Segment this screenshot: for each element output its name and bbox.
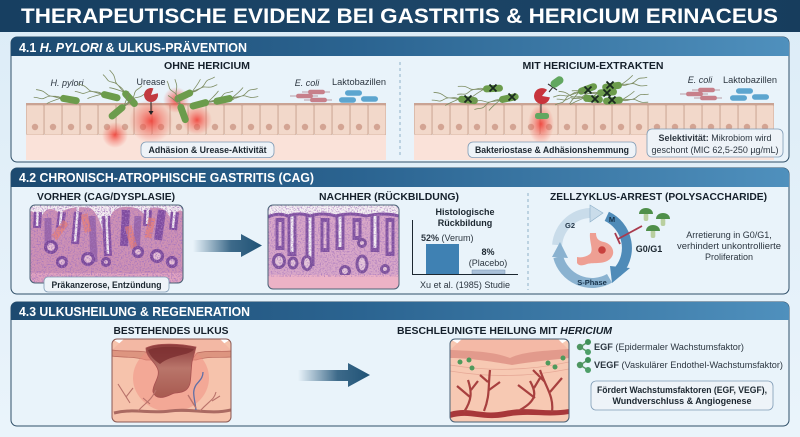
text: Arretierung: Arretierung in G0/G1,: [686, 230, 772, 240]
sub-panel: mit Hericium: [414, 61, 783, 160]
glow under inhibitor: [528, 104, 554, 144]
section header 4.3: 4.3 ULKUSHEILUNG & REGENERATION: [19, 304, 250, 319]
section header 4.1: [11, 37, 789, 56]
bar chart: histologische Rückbildung: Rückbildung: [438, 218, 492, 228]
epithelium left: [26, 103, 386, 160]
bar chart: histologische Rückbildung: Xu et al. (1985) Studie: [420, 280, 510, 290]
bar chart: histologische Rückbildung: 52% (Verum): [421, 233, 474, 243]
section header 4.3: [11, 302, 789, 320]
title banner: THERAPEUTISCHE EVIDENZ BEI GASTRITIS & HERICIUM ERINACEUS: [21, 5, 778, 28]
caption: Präkanzerose: Präkanzerose, Entzündung: [52, 280, 162, 290]
inhibition line: [615, 226, 642, 244]
commensal bacteria right: [680, 88, 769, 101]
illustration: ulcer: [112, 339, 231, 422]
caption: Adhäsion: [141, 142, 274, 158]
icon: VEGF molecule: [577, 357, 591, 373]
labels: commensals: Laktobazillen: [723, 75, 777, 85]
section header 4.1: 4.1 H. PYLORI & ULKUS-PRÄVENTION: [19, 40, 247, 55]
callout: Selektivität: [647, 129, 783, 157]
commensal bacteria left: [290, 90, 378, 103]
caption: Adhäsion: Adhäsion & Urease-Aktivität: [148, 145, 267, 155]
callout: Selektivität: Selektivität: Mikrobiom wird: [658, 133, 772, 143]
image frame after: [268, 205, 399, 289]
caption: Bakteriostase: [468, 142, 636, 158]
panel: 4.2 CAG: [11, 168, 789, 294]
callout: Selektivität: geschont (MIC 62,5-250 µg/mL): [652, 145, 778, 155]
heading: vorher: VORHER (CAG/DYSPLASIE): [37, 192, 175, 203]
divider: [399, 62, 401, 158]
epithelium right: [414, 103, 774, 160]
callout: Wachstumsfaktoren: [591, 381, 773, 410]
heading: beschleunigte Heilung: BESCHLEUNIGTE HEILUNG MIT HERICIUM: [397, 326, 613, 337]
heading: mit Hericium: MIT HERICIUM-EXTRAKTEN: [522, 61, 664, 72]
label: G0/G1: G0/G1: [636, 244, 662, 254]
text: Arretierung: Proliferation: [705, 252, 753, 262]
labels: organisms: Laktobazillen: [332, 77, 386, 87]
H. pylori bacteria: [33, 69, 259, 126]
inflammation glows: [102, 87, 212, 148]
histology after: [268, 205, 399, 289]
inhibited bacteria: [431, 73, 649, 113]
cell cycle diagram: [552, 205, 630, 287]
labels: organisms: [50, 77, 386, 88]
caption: Bakteriostase: Bakteriostase & Adhäsionshemmung: [475, 145, 629, 155]
callout: Wachstumsfaktoren: Fördert Wachstumsfaktoren (EGF, VEGF),: [597, 385, 767, 395]
text: Arretierung: verhindert unkontrollierte: [677, 241, 781, 251]
labels: commensals: E. coli: [688, 75, 713, 85]
text: VEGF: VEGF (Vaskulärer Endothel-Wachstumsfaktor): [594, 360, 783, 370]
icon: EGF molecule: [577, 339, 591, 355]
cell cycle diagram: M: [609, 215, 615, 224]
divider: [527, 193, 529, 290]
labels: organisms: Urease: [136, 77, 166, 87]
arrow: ulcer to healing: [298, 363, 370, 387]
cell cycle diagram: G2: [565, 221, 575, 230]
title banner: [0, 0, 800, 32]
section header 4.2: [11, 168, 789, 187]
heading: ohne Hericium: OHNE HERICIUM: [164, 61, 250, 72]
labels: commensals: [688, 75, 777, 85]
image frame ulcer: [112, 339, 231, 422]
sub-panel: ohne Hericium: [26, 61, 386, 160]
text: EGF: EGF (Epidermaler Wachstumsfaktor): [594, 342, 744, 352]
section header 4.2: 4.2 CHRONISCH-ATROPHISCHE GASTRITIS (CAG): [19, 170, 314, 185]
histology before: [30, 205, 183, 283]
illustration: healing tissue: [450, 339, 569, 422]
arrow: before to after: [193, 234, 262, 257]
icon: stomach: [577, 233, 613, 265]
icon: urease enzyme: [144, 88, 158, 115]
bar chart: histologische Rückbildung: 8%: [481, 247, 495, 257]
caption: Präkanzerose: [44, 277, 169, 292]
panel: 4.3 Ulkusheilung: [11, 302, 789, 426]
text: Arretierung: [677, 230, 781, 262]
callout: Wachstumsfaktoren: Wundverschluss & Angiogenese: [612, 396, 752, 406]
labels: organisms: H. pylori: [50, 78, 84, 88]
heading: Zellzyklus: ZELLZYKLUS-ARREST (POLYSACCHARIDE): [550, 192, 767, 203]
heading: bestehendes Ulkus: BESTEHENDES ULKUS: [114, 326, 229, 337]
panel: 4.1 H. pylori: [11, 37, 789, 162]
heading: nachher: NACHHER (RÜCKBILDUNG): [319, 190, 459, 203]
icon: blocked urease with inhibitor: [534, 75, 565, 119]
icon: mushrooms: [639, 208, 670, 238]
bar chart: histologische Rückbildung: (Placebo): [469, 258, 507, 268]
bar chart: histologische Rückbildung: [412, 207, 518, 290]
image frame before: [30, 205, 183, 283]
bar chart: histologische Rückbildung: Histologische: [435, 207, 495, 217]
labels: organisms: E. coli: [295, 78, 320, 88]
cell cycle diagram: S-Phase: [577, 278, 607, 287]
image frame healing: [450, 339, 569, 422]
